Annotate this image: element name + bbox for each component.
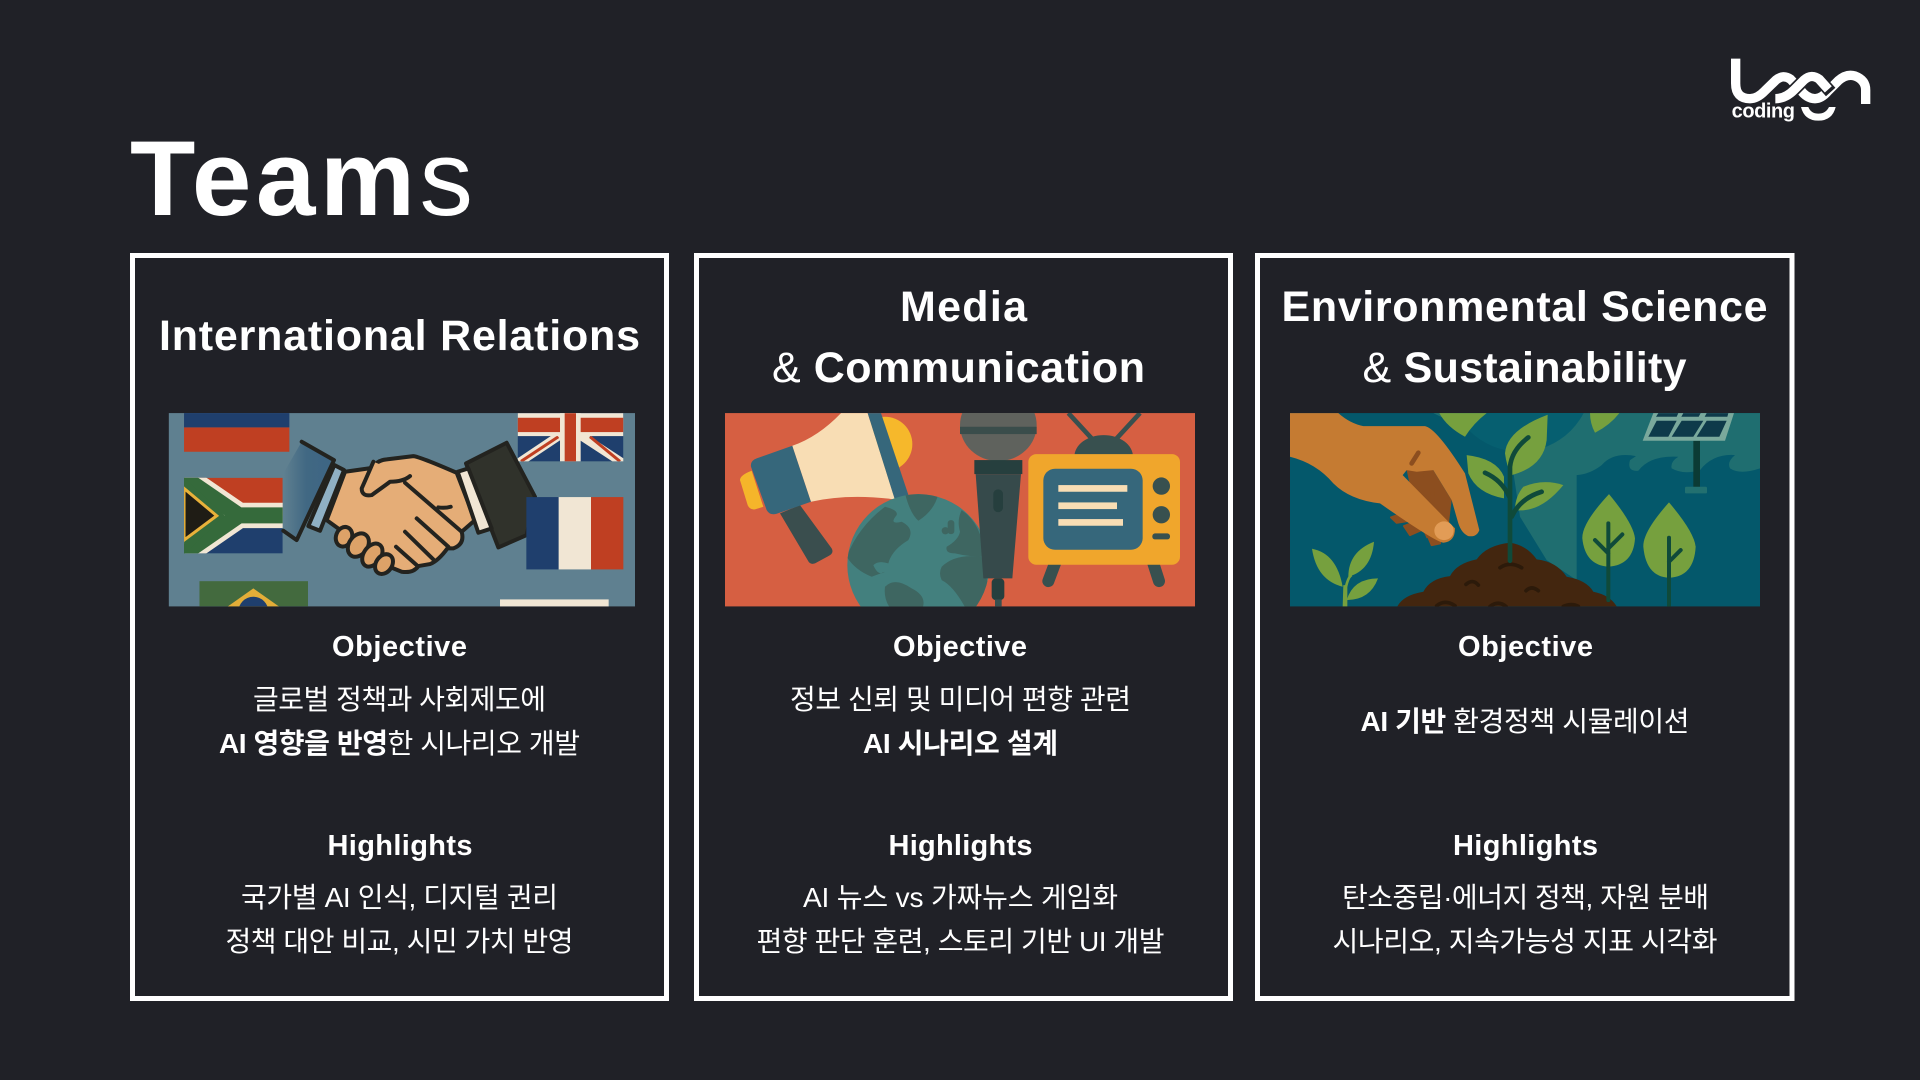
illustration: media icons [725, 413, 1195, 606]
illustration: handshake and flags [168, 413, 635, 606]
panel: Media & Communication [696, 256, 1230, 998]
highlights text: 탄소중립·에너지 정책, 자원 분배 [1342, 882, 1709, 913]
icon: megaphone [740, 413, 912, 564]
icon: white flag [500, 599, 609, 606]
icon: Brazil flag [200, 581, 308, 606]
highlights text: 국가별 AI 인식, 디지털 권리 [241, 882, 558, 913]
heading: Media & Communication [772, 283, 1145, 392]
heading: Media & Communication: Media [900, 283, 1028, 331]
objective heading: Objective [1458, 631, 1593, 663]
icon: seedling [1467, 415, 1563, 561]
objective heading: Objective [893, 631, 1027, 663]
objective text: 글로벌 정책과 사회제도에 [253, 684, 546, 715]
objective text [219, 684, 580, 759]
heading: Environmental Science & Sustainability: & Sustainability [1362, 344, 1687, 392]
icon: handshake [283, 442, 535, 577]
highlights text: 시나리오, 지속가능성 지표 시각화 [1332, 926, 1718, 957]
icon: UK flag [518, 413, 624, 462]
highlights text [756, 882, 1164, 957]
highlights text [1332, 882, 1718, 957]
icon: soil [1397, 543, 1617, 606]
logo: loop coding: coding [1732, 100, 1795, 122]
panel: International Relations [132, 256, 666, 998]
title: Teams [130, 118, 473, 238]
objective text: 정보 신뢰 및 미디어 편향 관련 [790, 684, 1131, 715]
icon: small sprout [1312, 542, 1378, 606]
heading: Media & Communication: & Communication [772, 344, 1145, 392]
panel: Environmental Science & Sustainability [1258, 256, 1792, 998]
heading: International Relations: International Relations [159, 312, 640, 360]
highlights text: 편향 판단 훈련, 스토리 기반 UI 개발 [756, 926, 1164, 957]
icon: trees [1582, 494, 1696, 606]
icon: television [1028, 413, 1180, 581]
objective heading: Objective [332, 631, 467, 663]
icon: solar panel [1643, 413, 1734, 493]
heading: Environmental Science & Sustainability [1282, 283, 1768, 392]
icon: globe [847, 494, 988, 606]
objective text: AI 영향을 반영한 시나리오 개발 [219, 728, 580, 759]
icon: flag top left [184, 413, 289, 452]
highlights heading: Highlights [888, 830, 1032, 862]
icon: hand [1290, 413, 1479, 545]
icon: South Africa flag [184, 478, 283, 554]
logo: loop coding [1731, 58, 1870, 122]
icon: French flag [526, 497, 623, 569]
highlights text [226, 882, 574, 957]
panel border [696, 256, 1230, 998]
highlights text: 정책 대안 비교, 시민 가치 반영 [226, 926, 574, 957]
icon: microphone [960, 389, 1037, 606]
objective text: AI 시나리오 설계 [863, 728, 1058, 759]
highlights heading: Highlights [1453, 830, 1598, 862]
highlights text: AI 뉴스 vs 가짜뉴스 게임화 [803, 882, 1118, 913]
objective text [790, 684, 1131, 759]
objective text: AI 기반 환경정책 시뮬레이션 [1360, 706, 1690, 737]
heading: Environmental Science & Sustainability: Environmental Science [1282, 283, 1768, 331]
panel border [132, 256, 666, 998]
illustration: planting and renewable energy [1290, 413, 1760, 606]
panel border [1258, 256, 1792, 998]
background landscape [1433, 308, 1760, 580]
highlights heading: Highlights [328, 830, 472, 862]
